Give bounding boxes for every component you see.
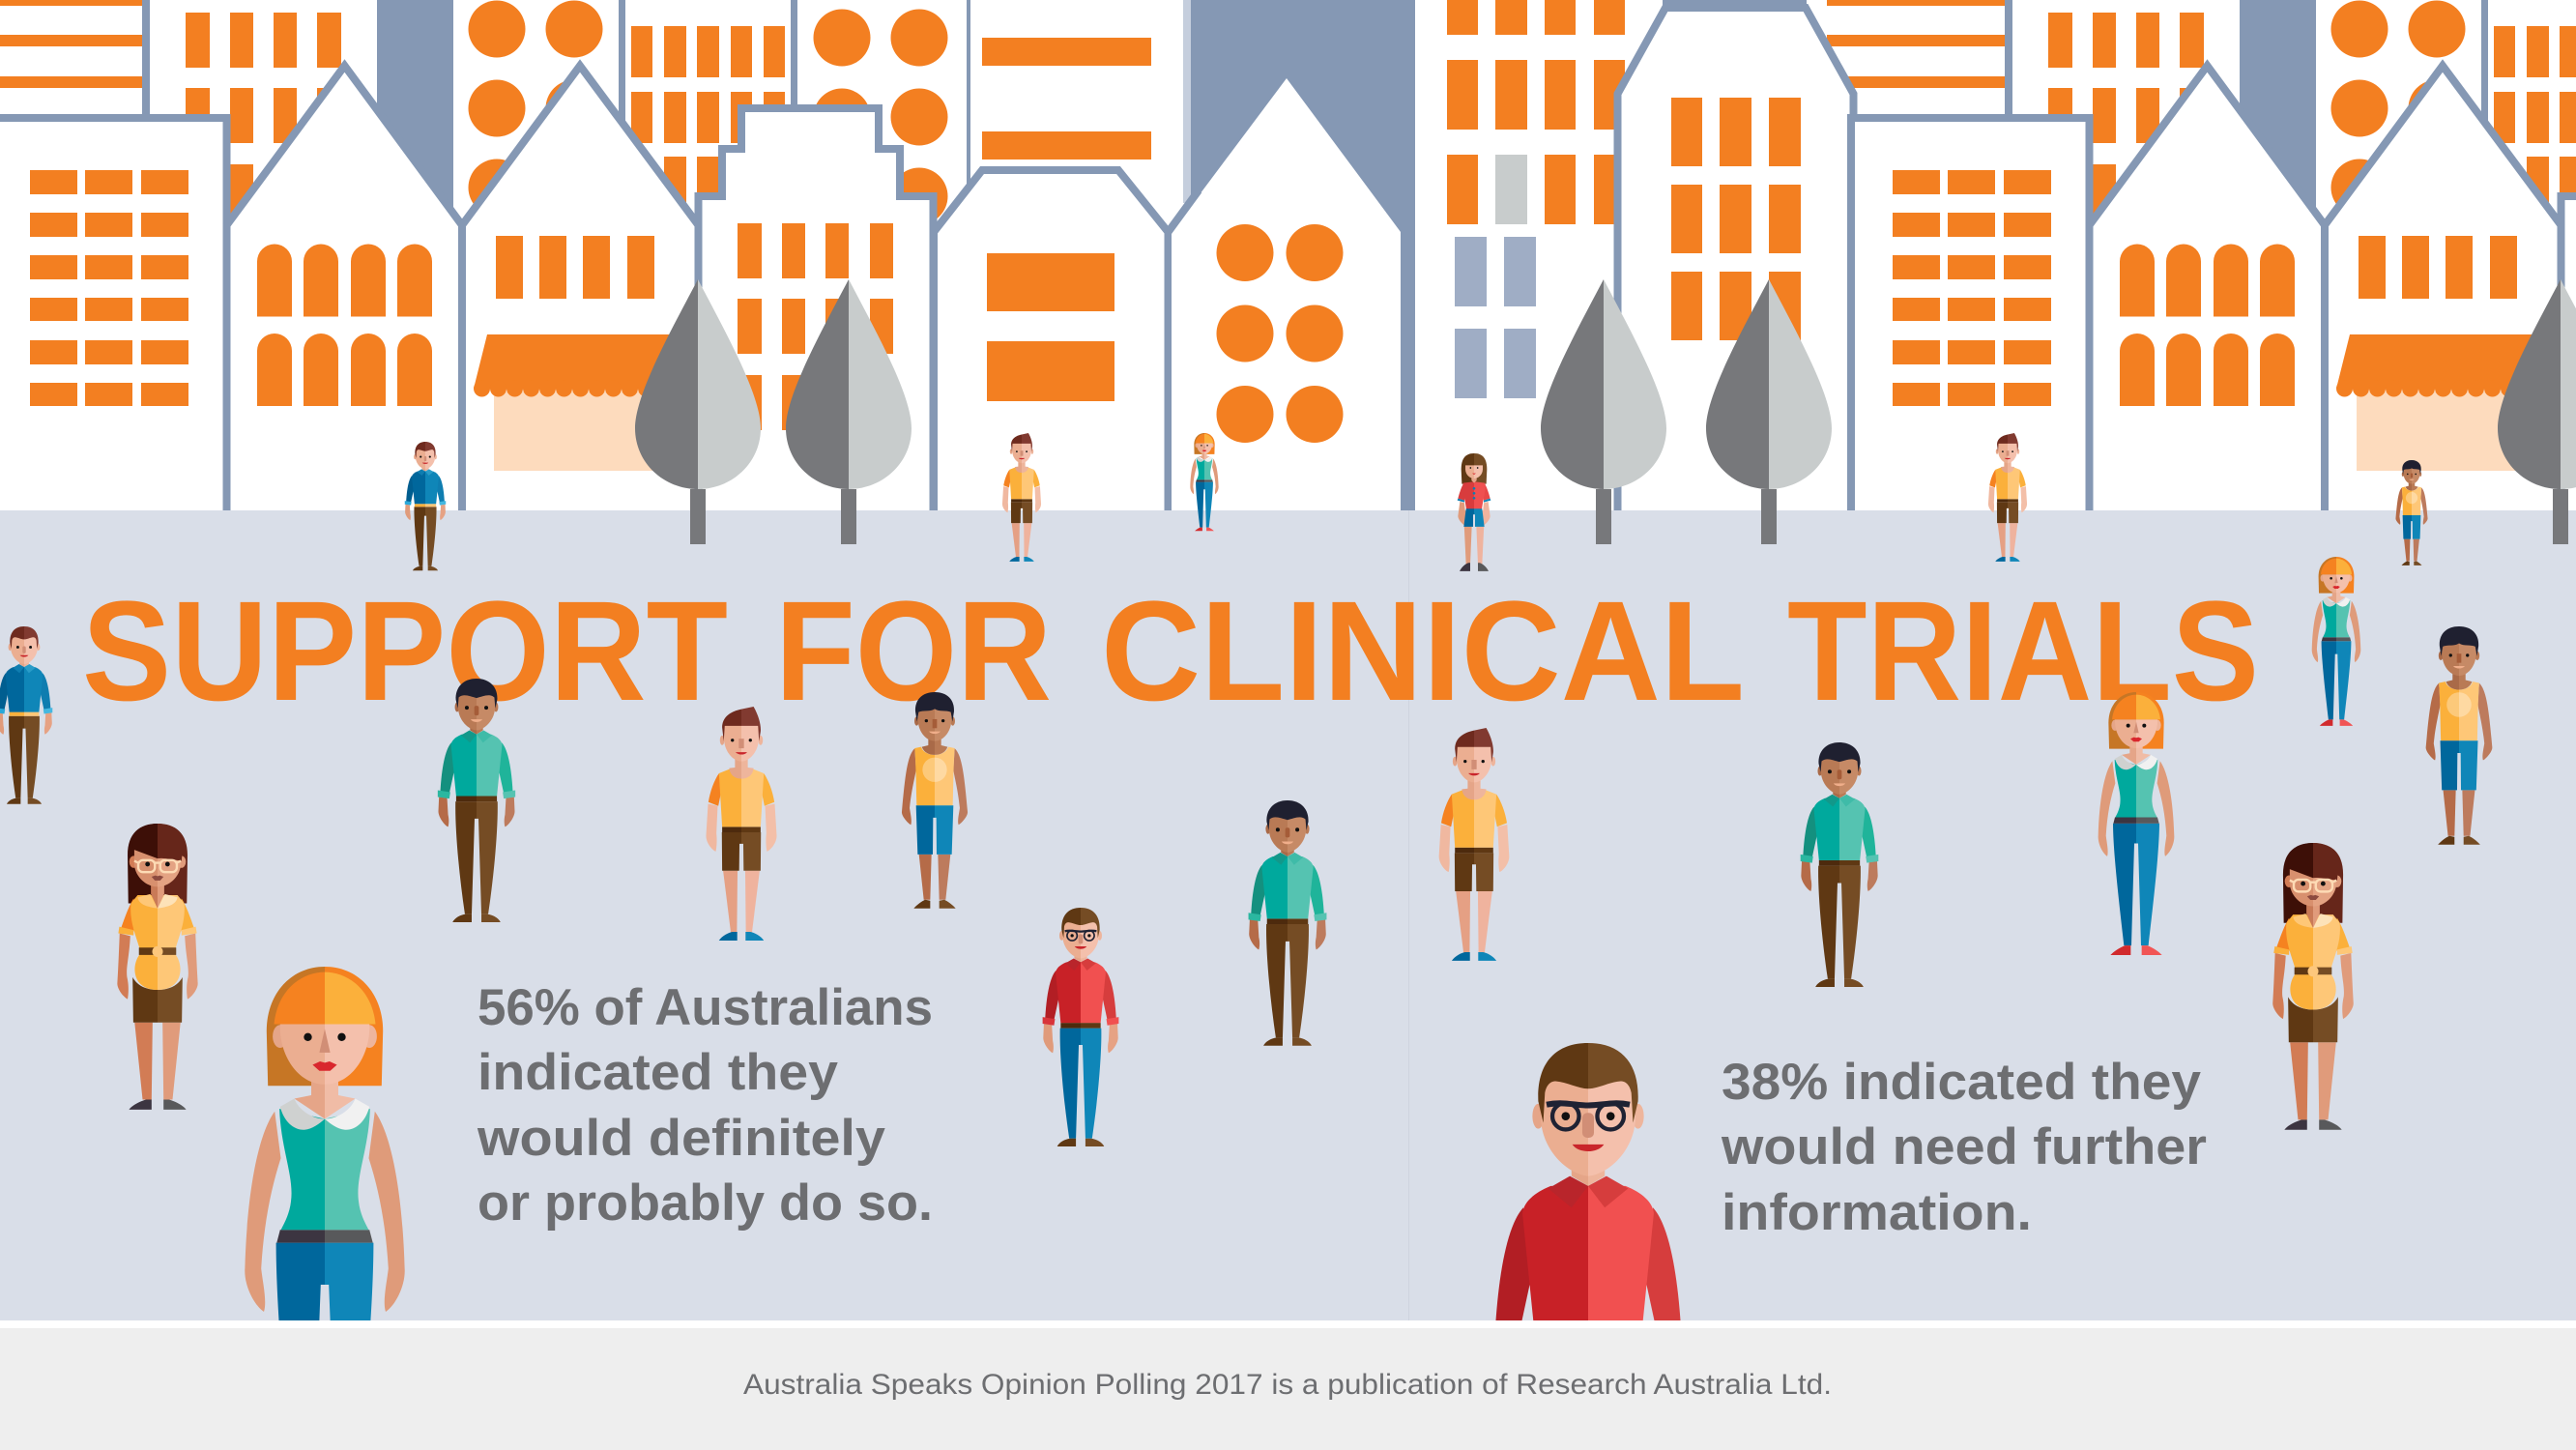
back row of buildings, right block (1827, 0, 2576, 232)
callout: 38 percent text: would need further (1721, 1118, 2207, 1175)
city background (0, 0, 2576, 522)
title: SUPPORT (82, 572, 728, 731)
figure: large woman in teal top (245, 967, 405, 1373)
footer band (0, 1320, 2576, 1450)
front row of houses, left block (0, 66, 934, 522)
figure: man in teal shirt overlapping title (438, 679, 515, 922)
figure: man in teal shirt right (1801, 742, 1878, 987)
footer text: Australia Speaks Opinion Polling 2017 is a publication of Research Australia Ltd. (743, 1369, 1832, 1401)
back building with two wide windows (967, 0, 1191, 232)
figure: boy in yellow tee right (1988, 433, 2027, 562)
figure: woman with glasses left (117, 824, 198, 1110)
house with two wide windows (934, 170, 1168, 522)
tree 1 (635, 279, 761, 544)
figure: woman in teal top overlapping title (2098, 692, 2174, 955)
figure: boy in yellow tee centre (1439, 728, 1509, 961)
figure: man in blue shirt near street (405, 442, 446, 570)
callout: 56 percent text (477, 979, 933, 1232)
figure: man in blue shirt at left edge (0, 626, 52, 804)
tall gabled house (1618, 0, 1854, 522)
figure: man in teal shirt centre (1249, 800, 1326, 1046)
callout: 56 percent text: indicated they (478, 1044, 839, 1101)
figure: woman in red shirt (1458, 453, 1491, 571)
figure: woman with glasses right (2272, 843, 2354, 1130)
tree 5 (2498, 279, 2576, 544)
tree 4 (1706, 279, 1832, 544)
house with round windows on blue backdrop (1168, 0, 1415, 522)
tall building with blue and orange windows (1415, 0, 1625, 510)
title: CLINICAL (1101, 572, 1745, 731)
figure: boy in yellow tee (706, 707, 777, 941)
figure: man in tank top (902, 692, 968, 909)
callout: 38 percent text: information. (1722, 1184, 2032, 1241)
callout: 56 percent text: would definitely (477, 1110, 886, 1167)
trees (635, 279, 2576, 544)
callout: 56 percent text: or probably do so. (478, 1174, 933, 1232)
figure: man in red shirt with glasses (1043, 908, 1118, 1146)
figure: man in tank top right (2426, 626, 2492, 845)
callout: 56 percent text: 56% of Australians (478, 979, 933, 1036)
title: TRIALS (1787, 572, 2259, 731)
back row of buildings, left block (0, 0, 947, 232)
ground (0, 510, 2576, 1322)
callout: 38 percent text: 38% indicated they (1722, 1054, 2202, 1111)
callout: 38 percent text (1721, 1054, 2207, 1241)
figure: woman in teal top near street (1190, 433, 1219, 531)
tree 3 (1541, 279, 1666, 544)
title: FOR (775, 572, 1052, 731)
front row of houses, right block (1851, 66, 2576, 522)
figure: man in tank top far right (2395, 460, 2428, 566)
title (82, 572, 2259, 731)
crowd of people (0, 433, 2492, 1424)
figure: woman in teal top far right (2312, 557, 2360, 726)
tree 2 (786, 279, 912, 544)
figure: boy in yellow tee near street (1002, 433, 1041, 562)
figure: large man in red shirt with glasses (1489, 1043, 1688, 1424)
